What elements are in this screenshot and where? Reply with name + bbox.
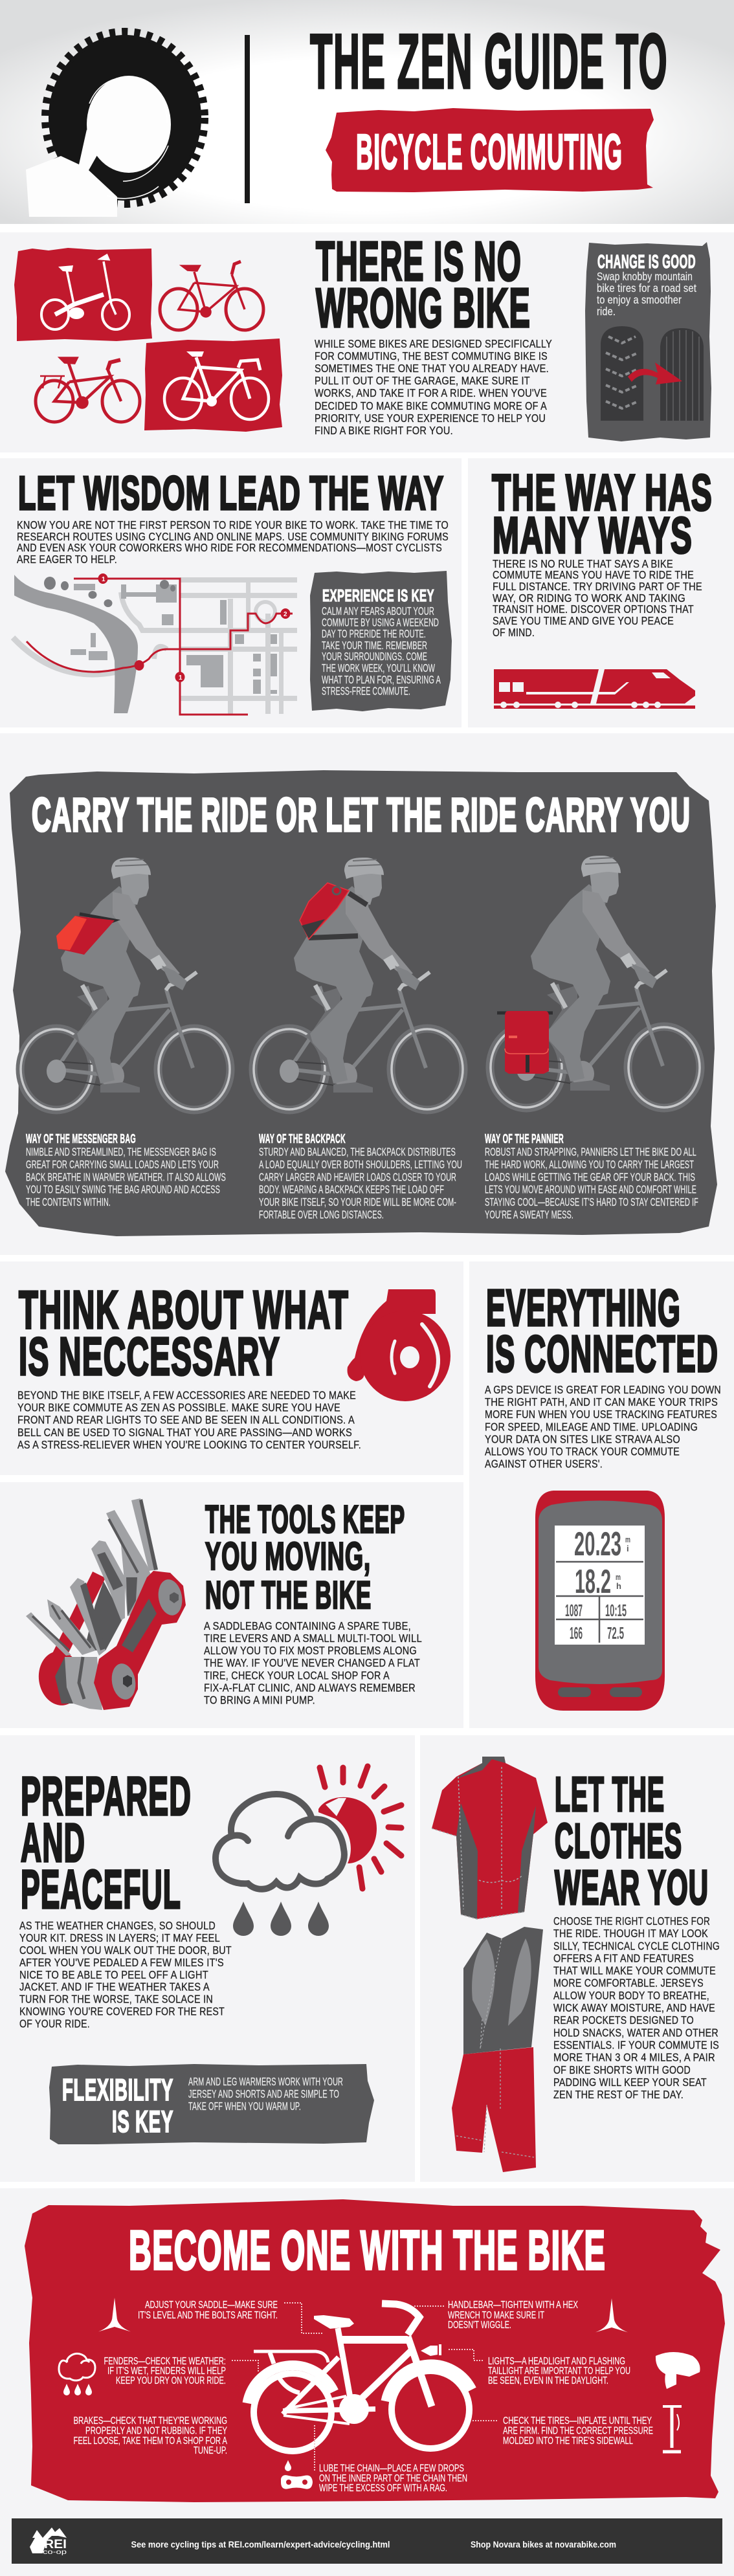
panel: the tools keep you moving	[0, 1482, 463, 1728]
label: fenders	[104, 2356, 226, 2386]
chart: route map: 2	[284, 611, 287, 618]
icon: pannier	[497, 1011, 553, 1074]
callout: experience is key	[310, 571, 452, 711]
caption: messenger bag: THE CONTENTS WITHIN.	[26, 1195, 111, 1208]
caption: backpack: STURDY AND BALANCED, THE BACKPACK DISTRIBUTES	[259, 1146, 456, 1159]
figure: backpack rider	[253, 858, 463, 1110]
text block: THE WAY. IF YOU'VE NEVER CHANGED A FLAT	[204, 1656, 420, 1669]
illustration: central bike	[247, 2304, 472, 2451]
caption: backpack: A LOAD EQUALLY OVER BOTH SHOULDERS, LETTING YOU	[259, 1158, 462, 1171]
icon: knobby tire	[601, 326, 643, 421]
icon: GPS device: 20.23	[574, 1526, 621, 1563]
text block	[315, 337, 552, 437]
icon: GPS device: h	[616, 1581, 621, 1591]
label: lights: BE SEEN, EVEN IN THE DAYLIGHT.	[488, 2375, 608, 2386]
heading: PREPARED	[21, 1766, 192, 1827]
link text: See more cycling tips at REI.com/learn/expert-advice/cycling.html	[131, 2539, 390, 2549]
icon: multi-tool	[26, 1498, 186, 1710]
text block: COMMUTE MEANS YOU HAVE TO RIDE THE	[493, 568, 694, 581]
label: adjust your saddle	[138, 2300, 278, 2321]
icon: GPS device: 166	[570, 1623, 583, 1643]
heading	[555, 1767, 709, 1915]
link text: Shop Novara bikes at novarabike.com	[471, 2539, 616, 2549]
caption: pannier	[485, 1132, 698, 1221]
figure: messenger bag rider	[20, 858, 230, 1110]
text block: YOUR KIT. DRESS IN LAYERS; IT MAY FEEL	[19, 1931, 220, 1944]
banner: bicycle commuting	[326, 108, 654, 192]
label: lube the chain: ON THE INNER PART OF THE CHAIN THEN	[319, 2473, 467, 2484]
arrow	[628, 362, 682, 384]
icon: cloud and sun	[216, 1766, 401, 1936]
caption: messenger bag: NIMBLE AND STREAMLINED, THE MESSENGER BAG IS	[26, 1146, 216, 1159]
heading: LET WISDOM LEAD THE WAY	[18, 467, 444, 520]
text block: TIRE LEVERS AND A SMALL MULTI-TOOL WILL	[204, 1632, 422, 1645]
text block: AGAINST OTHER USERS'.	[485, 1458, 603, 1471]
text block: REAR POCKETS DESIGNED TO	[553, 2014, 694, 2026]
callout: experience is key: YOUR SURROUNDINGS. COME	[322, 650, 427, 663]
text block: THERE IS NO RULE THAT SAYS A BIKE	[493, 557, 673, 570]
icon: small cloud and rain	[59, 2353, 95, 2395]
label: lube the chain	[319, 2463, 467, 2494]
label: handlebar: WRENCH TO MAKE SURE IT	[448, 2310, 544, 2321]
text block: KNOWING YOU'RE COVERED FOR THE REST	[19, 2005, 225, 2018]
caption: backpack: YOUR BIKE ITSELF, SO YOUR RIDE WILL BE MORE COM-	[259, 1195, 456, 1208]
heading	[205, 1498, 405, 1617]
icon: GPS device: 18.2	[575, 1563, 611, 1601]
label: lights	[488, 2356, 630, 2386]
text block: OF MIND.	[493, 626, 535, 639]
text block: A SADDLEBAG CONTAINING A SPARE TUBE,	[204, 1619, 411, 1632]
caption: messenger bag: GREAT FOR CARRYING SMALL LOADS AND LETS YOUR	[26, 1158, 219, 1171]
label: brakes: PROPERLY AND NOT RUBBING. IF THEY	[85, 2426, 227, 2436]
text block: OF BIKE SHORTS WITH GOOD	[553, 2063, 691, 2076]
background blob	[5, 770, 717, 1236]
callout: flexibility is key: FLEXIBILITY	[62, 2072, 173, 2107]
label: brakes: FEEL LOOSE, TAKE THEM TO A SHOP FOR A	[74, 2436, 227, 2447]
panel: header background	[0, 0, 734, 224]
chart: route map	[13, 573, 297, 715]
text block: AFTER YOU'VE PEDALED A FEW MILES IT'S	[19, 1956, 224, 1969]
caption: backpack: BODY. WEARING A BACKPACK KEEPS THE LOAD OFF	[259, 1183, 444, 1196]
heading	[21, 1766, 192, 1920]
text block: FIND A BIKE RIGHT FOR YOU.	[315, 424, 453, 437]
icon: GPS device	[535, 1491, 665, 1711]
icon: mountain bike	[160, 261, 263, 330]
text block: AND EVEN ASK YOUR COWORKERS WHO RIDE FOR RECOMMENDATIONS—MOST CYCLISTS	[17, 541, 442, 554]
callout: experience is key: COMMUTE BY USING A WEEKEND	[322, 616, 439, 629]
label: brakes: BRAKES—CHECK THAT THEY'RE WORKING	[74, 2415, 227, 2426]
red square: folding bike	[14, 248, 152, 341]
caption: backpack: CARRY LARGER AND HEAVIER LOADS CLOSER TO YOUR	[259, 1170, 456, 1183]
callout: flexibility is key	[49, 2064, 374, 2144]
panel: become one with the bike	[0, 2188, 734, 2576]
heading	[19, 1280, 349, 1386]
label: lube the chain: WIPE THE EXCESS OFF WITH A RAG.	[319, 2483, 447, 2494]
callout: experience is key: THE WORK WEEK, YOU'LL KNOW	[322, 661, 435, 674]
text block: AS THE WEATHER CHANGES, SO SHOULD	[19, 1919, 216, 1932]
label: handlebar: HANDLEBAR—TIGHTEN WITH A HEX	[448, 2300, 578, 2311]
caption: backpack	[259, 1132, 462, 1221]
text block	[204, 1619, 422, 1707]
icon: touring bike	[36, 358, 140, 422]
callout: experience is key: DAY TO PRERIDE THE ROUTE.	[322, 627, 426, 640]
panel: the way has many ways	[468, 458, 734, 727]
footer bar	[12, 2518, 722, 2564]
text block: SOMETIMES THE ONE THAT YOU ALREADY HAVE.	[315, 362, 549, 375]
label: lube the chain: LUBE THE CHAIN—PLACE A FEW DROPS	[319, 2463, 464, 2474]
text block: COOL WHEN YOU WALK OUT THE DOOR, BUT	[19, 1944, 232, 1957]
logo: REI co-op	[30, 2527, 67, 2556]
panel: let wisdom lead the way	[0, 458, 462, 727]
text block: FOR COMMUTING, THE BEST COMMUTING BIKE IS	[315, 350, 548, 362]
text block: TURN FOR THE WORSE, TAKE SOLACE IN	[19, 1993, 213, 2006]
text block: PRIORITY, USE YOUR EXPERIENCE TO HELP YOU	[315, 412, 546, 425]
heading	[316, 231, 531, 339]
caption: messenger bag: WAY OF THE MESSENGER BAG	[26, 1132, 136, 1146]
chart: route map: 1	[179, 674, 183, 682]
text block	[19, 1919, 232, 2030]
panel: think about what is necessary	[0, 1261, 463, 1475]
panel: prepared and peaceful	[0, 1735, 415, 2182]
heading: WRONG BIKE	[316, 278, 531, 339]
red square: road bike	[144, 339, 282, 432]
text block: ZEN THE REST OF THE DAY.	[553, 2088, 684, 2101]
caption: pannier: YOU'RE A SWEATY MESS.	[485, 1208, 573, 1221]
caption: backpack: FORTABLE OVER LONG DISTANCES.	[259, 1208, 384, 1221]
label: handlebar: DOESN'T WIGGLE.	[448, 2320, 511, 2331]
icon: chain link and drop	[281, 2460, 313, 2489]
icon: enso gear logo	[26, 33, 203, 217]
icon: GPS device: i	[627, 1544, 629, 1553]
heading: YOU MOVING,	[205, 1535, 371, 1578]
label: brakes: TUNE-UP.	[194, 2445, 227, 2456]
callout: experience is key: CALM ANY FEARS ABOUT YOUR	[322, 605, 434, 617]
logo: REI co-op: REI	[44, 2538, 67, 2551]
text block: YOUR BIKE COMMUTE AS ZEN AS POSSIBLE. MAKE SURE YOU HAVE	[17, 1401, 340, 1414]
text block: AS A STRESS-RELIEVER WHEN YOU'RE LOOKING TO CENTER YOURSELF.	[17, 1438, 361, 1451]
label: tires: CHECK THE TIRES—INFLATE UNTIL THEY	[503, 2415, 652, 2426]
figure: pannier rider	[490, 856, 700, 1108]
text block: TO BRING A MINI PUMP.	[204, 1694, 315, 1707]
text block: TRANSIT HOME. DISCOVER OPTIONS THAT	[493, 603, 694, 616]
text block: JACKET. AND IF THE WEATHER TAKES A	[19, 1981, 210, 1993]
text block: PULL IT OUT OF THE GARAGE, MAKE SURE IT	[315, 374, 530, 387]
text block: WAY, OR RIDING TO WORK AND TAKING	[493, 592, 685, 605]
label: adjust your saddle: IT'S LEVEL AND THE BOLTS ARE TIGHT.	[138, 2310, 278, 2321]
icon: GPS device: 1087	[565, 1601, 583, 1620]
caption: messenger bag: BACK BREATHE IN WARMER WEATHER. IT ALSO ALLOWS	[26, 1170, 226, 1183]
icon: bike light	[656, 2352, 700, 2389]
text block: RESEARCH ROUTES USING CYCLING AND ONLINE MAPS. USE COMMUNITY BIKING FORUMS	[17, 530, 449, 543]
text block: MORE COMFORTABLE. JERSEYS	[553, 1977, 704, 1990]
callout: flexibility is key: IS KEY	[112, 2104, 173, 2138]
label: lights: TAILLIGHT ARE IMPORTANT TO HELP YOU	[488, 2366, 630, 2377]
panel: there is no wrong bike	[0, 231, 734, 452]
icon: multi-tool left	[98, 2298, 131, 2331]
callout: flexibility is key: ARM AND LEG WARMERS WORK WITH YOUR	[188, 2075, 343, 2088]
label: fenders: KEEP YOU DRY ON YOUR RIDE.	[116, 2375, 226, 2386]
callout: change is good: ride.	[597, 305, 616, 318]
text block: BEYOND THE BIKE ITSELF, A FEW ACCESSORIES ARE NEEDED TO MAKE	[17, 1389, 356, 1402]
icon: train	[494, 669, 695, 709]
callout: experience is key: WHAT TO PLAN FOR, ENSURING A	[322, 673, 441, 686]
text block: TIRE, CHECK YOUR LOCAL SHOP FOR A	[204, 1669, 390, 1682]
icon: floor pump	[663, 2406, 682, 2452]
icon: bell	[348, 1289, 450, 1401]
label: fenders: FENDERS—CHECK THE WEATHER:	[104, 2356, 226, 2367]
caption: backpack: WAY OF THE BACKPACK	[259, 1132, 346, 1146]
heading: THE TOOLS KEEP	[205, 1498, 405, 1541]
icon: bib shorts	[452, 1927, 543, 2172]
callout: flexibility is key: JERSEY AND SHORTS AND ARE SIMPLE TO	[188, 2087, 339, 2100]
icon: messenger bag	[56, 914, 115, 955]
heading	[486, 1279, 718, 1382]
text block	[553, 1915, 720, 2101]
callout: change is good: to enjoy a smoother	[597, 293, 682, 306]
text block	[17, 518, 449, 566]
callout: change is good: bike tires for a road set	[597, 282, 696, 294]
label: fenders: IF IT'S WET, FENDERS WILL HELP	[107, 2366, 226, 2377]
callout: change is good: Swap knobby mountain	[597, 270, 693, 283]
label: tires: ARE FIRM. FIND THE CORRECT PRESSURE	[503, 2426, 653, 2436]
callout: experience is key: EXPERIENCE IS KEY	[322, 586, 434, 605]
heading: NOT THE BIKE	[205, 1573, 372, 1617]
icon: GPS device: 10:15	[605, 1601, 627, 1620]
text block: KNOW YOU ARE NOT THE FIRST PERSON TO RIDE YOUR BIKE TO WORK. TAKE THE TIME TO	[17, 518, 449, 531]
callout: experience is key: TAKE YOUR TIME. REMEMBER	[322, 639, 427, 652]
chart: route map: 1	[102, 576, 106, 583]
text block: ARE EAGER TO HELP.	[17, 553, 117, 566]
text block: DECIDED TO MAKE BIKE COMMUTING MORE OF A	[315, 399, 547, 412]
icon: GPS device: m	[625, 1535, 630, 1544]
heading: AND	[21, 1812, 85, 1873]
text block: YOUR DATA ON SITES LIKE STRAVA ALSO	[485, 1432, 680, 1445]
label: lights: LIGHTS—A HEADLIGHT AND FLASHING	[488, 2356, 625, 2367]
callout: flexibility is key: TAKE OFF WHEN YOU WARM UP.	[188, 2100, 301, 2113]
caption: messenger bag: YOU TO EASILY SWING THE BAG AROUND AND ACCESS	[26, 1183, 220, 1196]
caption: messenger bag	[26, 1132, 226, 1208]
icon: road tire	[660, 328, 704, 421]
panel: everything is connected	[469, 1261, 734, 1728]
text block: FIX-A-FLAT CLINIC, AND ALWAYS REMEMBER	[204, 1681, 416, 1694]
text block: ALLOWS YOU TO TRACK YOUR COMMUTE	[485, 1445, 680, 1458]
text block: WHILE SOME BIKES ARE DESIGNED SPECIFICALLY	[315, 337, 552, 350]
icon: cycling jersey	[432, 1757, 548, 1919]
panel: let the clothes wear you	[420, 1735, 734, 2182]
divider line	[245, 35, 250, 203]
background blob	[25, 2199, 725, 2502]
logo: REI co-op: co-op	[43, 2549, 67, 2556]
label: brakes	[74, 2415, 227, 2456]
icon: multi-tool right	[595, 2298, 628, 2333]
heading: IS NECCESSARY	[19, 1326, 280, 1386]
caption: pannier: WAY OF THE PANNIER	[485, 1132, 564, 1146]
callout: experience is key: STRESS-FREE COMMUTE.	[322, 685, 410, 698]
text block: ALLOW YOU TO FIX MOST PROBLEMS ALONG	[204, 1644, 417, 1657]
icon: GPS device: 72.5	[607, 1623, 624, 1643]
text block	[485, 1383, 721, 1471]
text block: BELL CAN BE USED TO SIGNAL THAT YOU ARE PASSING—AND WORKS	[17, 1426, 352, 1439]
text block: OFFERS A FIT AND FEATURES	[553, 1951, 694, 1964]
text block	[17, 1389, 361, 1451]
icon: GPS device: m	[616, 1572, 621, 1582]
panel: carry the ride	[0, 733, 734, 1255]
label: tires	[503, 2415, 653, 2447]
text block	[493, 557, 702, 639]
dotted leader lines	[232, 2303, 498, 2471]
text block: WORKS, AND TAKE IT FOR A RIDE. WHEN YOU'VE	[315, 386, 547, 399]
text block: NICE TO BE ABLE TO PEEL OFF A LIGHT	[19, 1968, 208, 1981]
heading	[492, 463, 713, 564]
callout: change is good	[585, 242, 711, 441]
label: adjust your saddle: ADJUST YOUR SADDLE—MAKE SURE	[145, 2300, 278, 2311]
text block: FRONT AND REAR LIGHTS TO SEE AND BE SEEN IN ALL CONDITIONS. A	[17, 1414, 355, 1427]
heading: PEACEFUL	[21, 1859, 181, 1920]
text block: SAVE YOU TIME AND GIVE YOU PEACE	[493, 614, 674, 627]
label: tires: MOLDED INTO THE TIRE'S SIDEWALL	[503, 2436, 633, 2447]
label: handlebar	[448, 2300, 578, 2331]
text block: OF YOUR RIDE.	[19, 2017, 90, 2030]
icon: backpack	[300, 883, 367, 939]
heading: THERE IS NO	[316, 231, 522, 293]
heading: THINK ABOUT WHAT	[19, 1280, 349, 1340]
